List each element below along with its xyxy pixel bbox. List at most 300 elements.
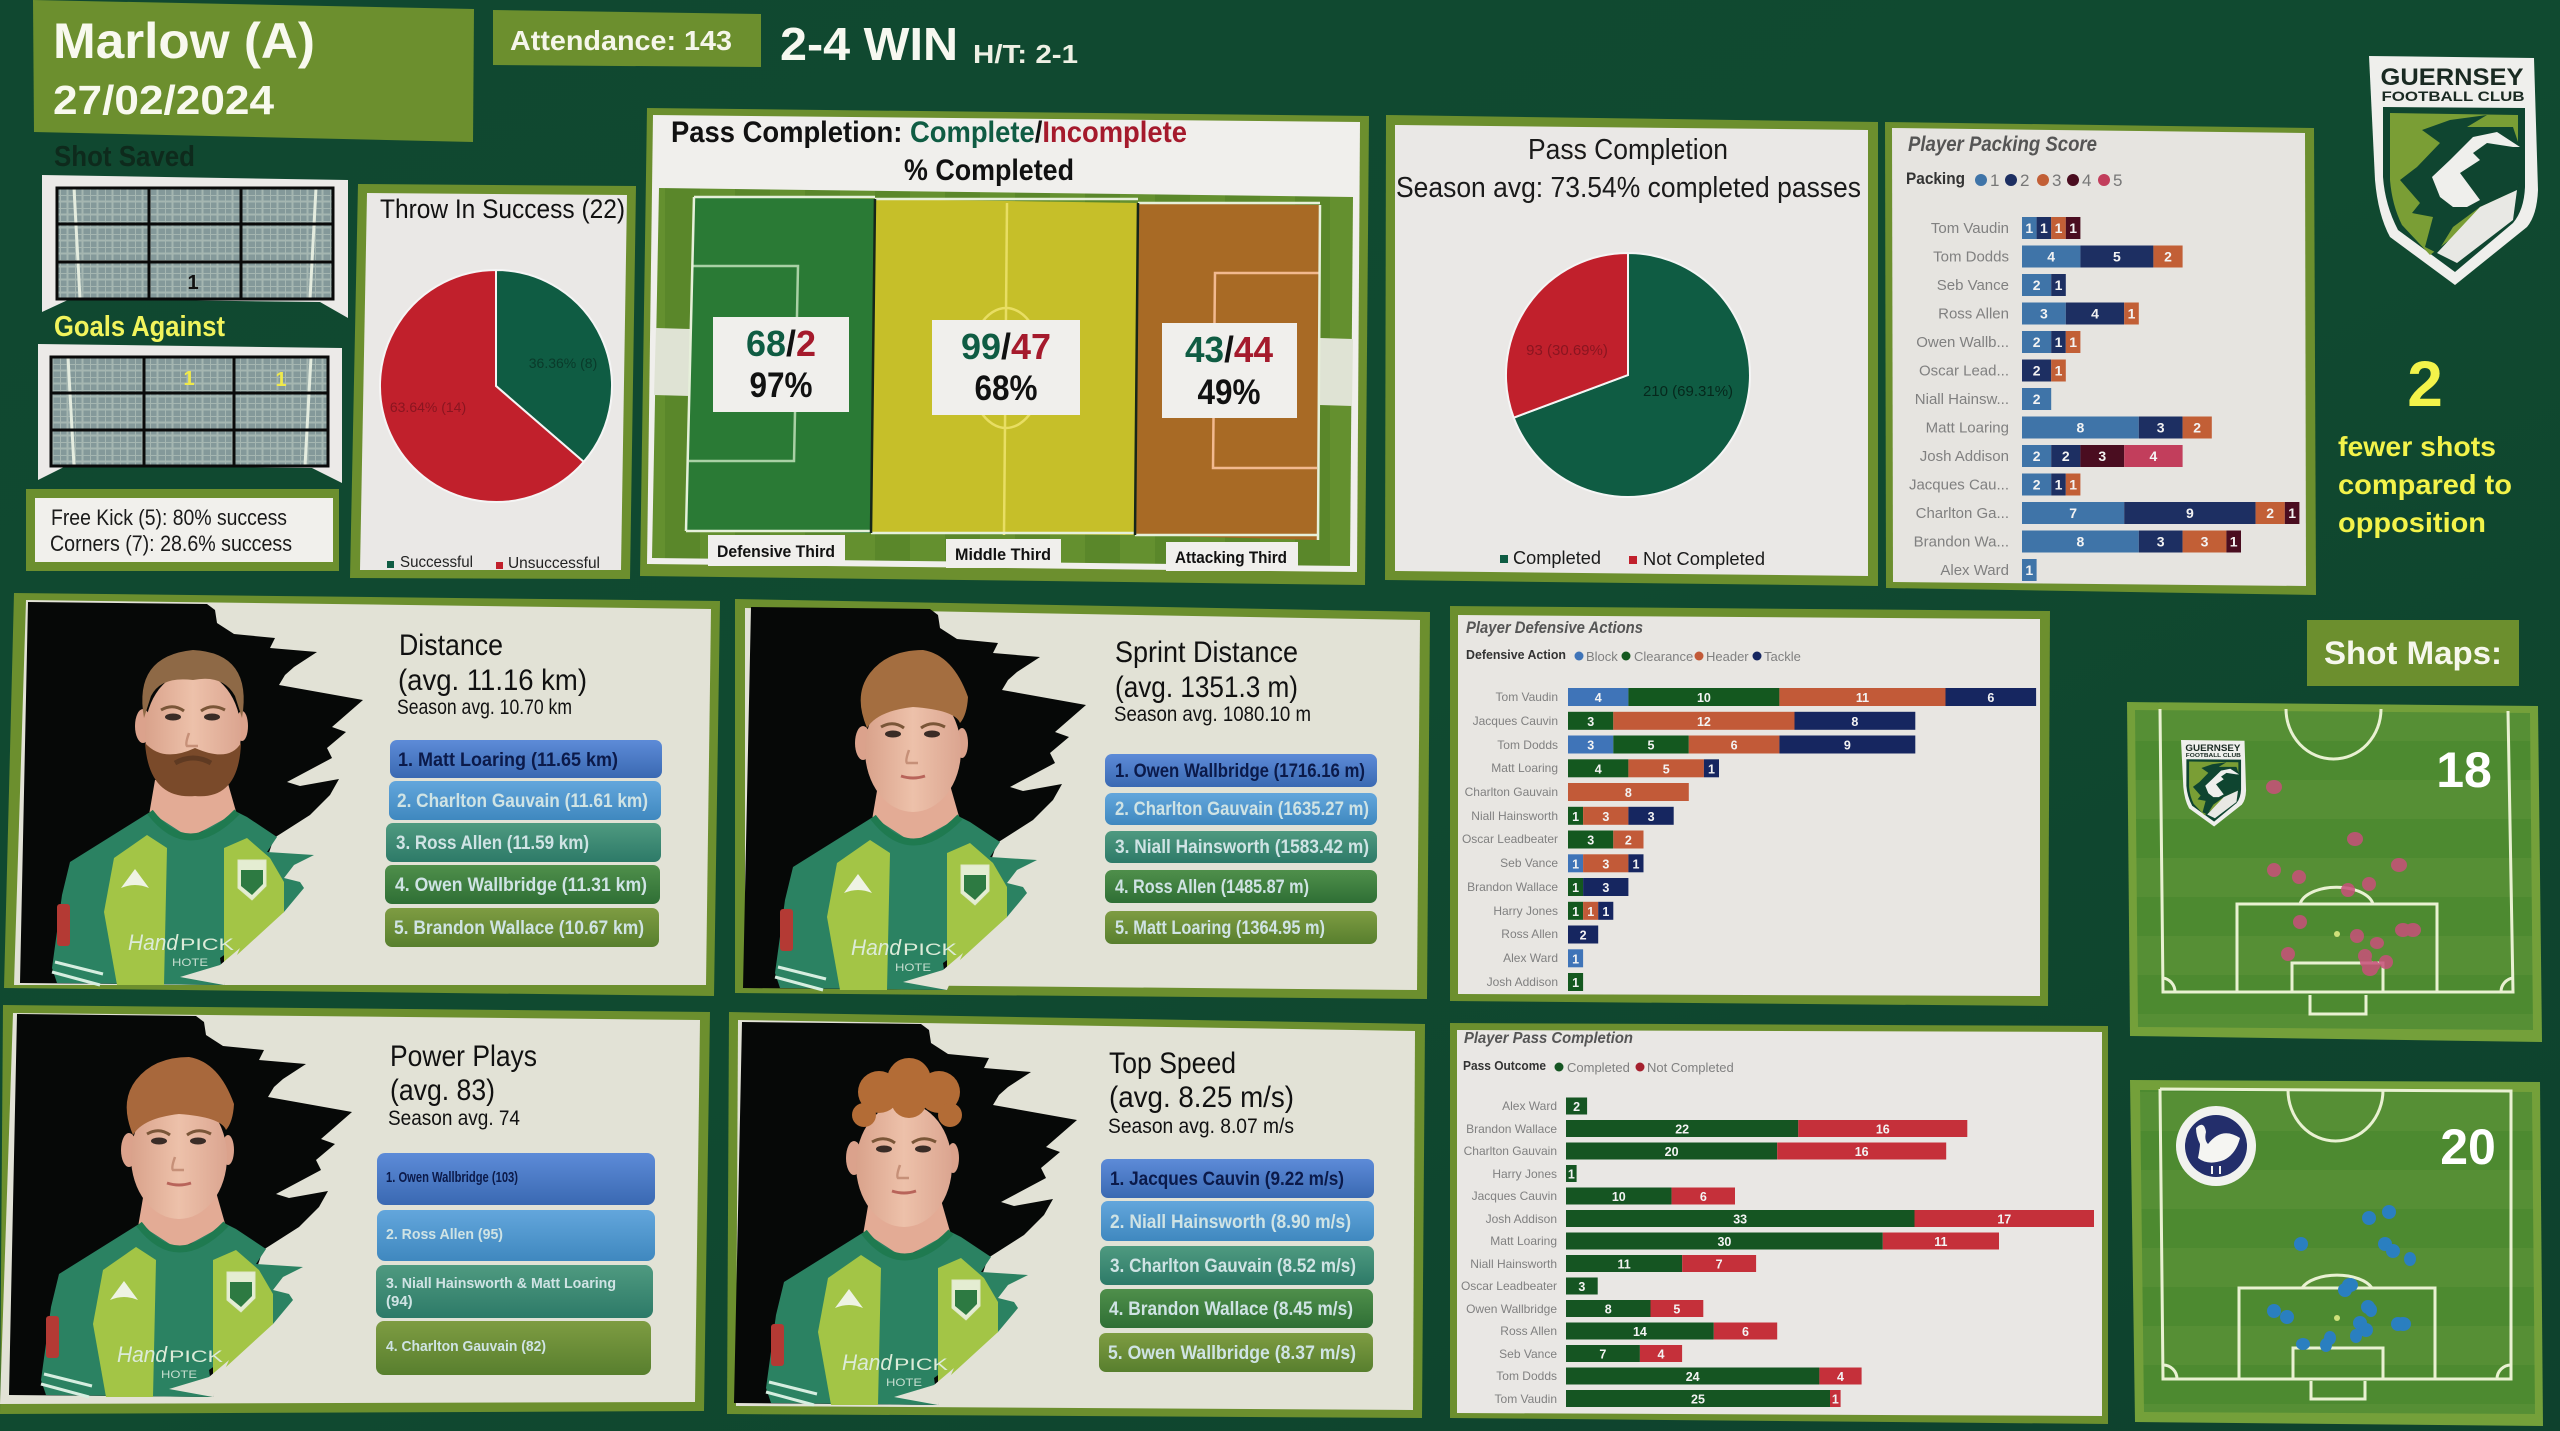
row: Tom Dodds: 4 — [2047, 248, 2055, 264]
row: Owen Wallbridge: 2 — [2033, 334, 2041, 350]
heading: top speed — [1108, 1047, 1294, 1138]
legend: passes: Completed — [1513, 548, 1601, 568]
heading: power plays: (avg. 83) — [390, 1074, 495, 1107]
row: Alex Ward: Alex Ward — [1502, 1099, 1557, 1113]
row: Tom Dodds — [1933, 246, 2183, 268]
bar chart: defensive actions — [1462, 688, 2036, 991]
value box: middle third: 99/47 — [961, 326, 1051, 367]
row: Seb Vance — [1937, 274, 2066, 296]
panel: set pieces: Free Kick (5): 80% success — [51, 505, 287, 530]
row: Matt Loaring: 8 — [2077, 420, 2085, 436]
row: Tom Vaudin — [1496, 688, 2036, 706]
row: Jacques Cauvin: Jacques Cauvin — [1473, 714, 1558, 728]
row: Matt Loaring: Matt Loaring — [1926, 420, 2009, 436]
row: Seb Vance: 3 — [1602, 857, 1609, 871]
legend: passes: Not Completed — [1643, 549, 1765, 569]
row: Josh Addison: 2 — [2033, 448, 2041, 464]
row: Seb Vance: 4 — [1658, 1348, 1665, 1362]
row: Tom Dodds: 6 — [1731, 738, 1738, 752]
row: Oscar Leadbeater: Oscar Leadbeater — [1462, 832, 1558, 846]
row: Charlton Gauvain: Charlton Gauvain — [1464, 1144, 1557, 1158]
row: Tom Dodds: Tom Dodds — [1496, 1369, 1557, 1383]
row: Josh Addison: Josh Addison — [1486, 1212, 1557, 1226]
legend: throw in — [387, 554, 600, 572]
heading: sprint distance: Sprint Distance — [1115, 636, 1298, 669]
legend: throw in: Unsuccessful — [508, 555, 600, 572]
row: Matt Loaring: 30 — [1717, 1235, 1731, 1249]
row: Alex Ward — [1940, 559, 2037, 581]
heading: defensive: Player Defensive Actions — [1466, 618, 1643, 637]
row: Niall Hainsworth: Niall Hainsworth — [1470, 1257, 1557, 1271]
row: Josh Addison — [1920, 445, 2183, 467]
row: Harry Jones: Harry Jones — [1493, 904, 1558, 918]
row: Jacques Cauvin — [1472, 1188, 1735, 1204]
callout: fewer shots — [2338, 348, 2512, 538]
title block — [33, 0, 474, 142]
row: Josh Addison: 2 — [2062, 448, 2070, 464]
label: shot maps: Shot Maps: — [2324, 635, 2502, 671]
row: Tom Vaudin: 25 — [1691, 1392, 1705, 1406]
row: Matt Loaring — [1926, 416, 2212, 438]
label: attacking third: Attacking Third — [1175, 548, 1287, 567]
row: Tom Vaudin: 4 — [1595, 691, 1602, 705]
row: Alex Ward: 1 — [1572, 952, 1579, 966]
pie chart: throw in: 36.36% (8) — [529, 355, 597, 371]
shots: Marlow — [2267, 1205, 2416, 1352]
match result — [780, 18, 1078, 70]
row: Ross Allen: Ross Allen — [1501, 927, 1558, 941]
row: Jacques Cauvin: Jacques Cauvin — [1472, 1189, 1557, 1203]
heading: power plays: Season avg. 74 — [388, 1107, 520, 1130]
panel: player packing score — [1885, 122, 2316, 595]
row: Tom Vaudin — [1495, 1390, 1841, 1407]
row: Owen Wallbridge: 1 — [2055, 334, 2063, 350]
row: Seb Vance: 1 — [2055, 277, 2063, 293]
ranking: distance — [385, 740, 662, 947]
goal: shots saved: 1 — [187, 272, 199, 294]
row: Josh Addison — [1487, 973, 1583, 991]
row: Niall Hainsworth: 11 — [1617, 1258, 1631, 1272]
legend: packing: 4 — [2082, 171, 2091, 190]
row: Ross Allen: 6 — [1742, 1325, 1749, 1339]
row: Owen Wallbridge — [1916, 331, 2080, 353]
row: Brandon Wallace: 3 — [2201, 534, 2209, 550]
ranking: distance: 1. Matt Loaring (11.65 km) — [398, 750, 618, 771]
heading: pass completion: Pass Completion: Complete/Incomplete — [671, 116, 1187, 149]
row: Ross Allen: 2 — [1580, 928, 1587, 942]
row: Seb Vance: 7 — [1599, 1348, 1606, 1362]
row: Matt Loaring: Matt Loaring — [1491, 761, 1558, 775]
row: Owen Wallbridge: 5 — [1673, 1302, 1680, 1316]
goal: goals against: 1 — [275, 369, 287, 391]
panel: top speed — [727, 1012, 1425, 1418]
row: Ross Allen — [1500, 1322, 1777, 1340]
attacking third zone — [1135, 203, 1320, 540]
row: Alex Ward: Alex Ward — [1940, 562, 2009, 579]
row: Seb Vance: Seb Vance — [1500, 856, 1558, 870]
label: attacking third — [1166, 542, 1298, 571]
icon: Guernsey FC crest — [2369, 56, 2538, 285]
row: Niall Hainsworth — [1471, 807, 1674, 825]
row: Tom Vaudin: Tom Vaudin — [1931, 220, 2009, 237]
row: Tom Vaudin: 1 — [2040, 220, 2048, 236]
row: Charlton Gauvain — [1465, 783, 1689, 801]
ranking: power plays: 4. Charlton Gauvain (82) — [386, 1338, 546, 1355]
row: Owen Wallbridge: Owen Wallb... — [1916, 334, 2009, 351]
shot map: Guernsey — [2127, 702, 2542, 1042]
row: Oscar Leadbeater: 2 — [2033, 362, 2041, 378]
value box: middle third: 68% — [974, 369, 1038, 408]
row: Josh Addison: Josh Addison — [1920, 448, 2009, 465]
player photo: power plays — [9, 1014, 352, 1397]
heading: pass completion pie: Pass Completion — [1528, 134, 1728, 166]
title block: 27/02/2024 — [53, 77, 274, 123]
row: Matt Loaring: 5 — [1663, 762, 1670, 776]
legend: throw in: Successful — [400, 554, 473, 571]
label: middle third — [946, 539, 1061, 568]
row: Jacques Cauvin: 1 — [2055, 476, 2063, 492]
row: Seb Vance — [1500, 854, 1644, 872]
heading: player pass completion: Player Pass Completion — [1464, 1030, 1633, 1047]
row: Alex Ward: Alex Ward — [1503, 951, 1558, 965]
row: Josh Addison: 17 — [1997, 1212, 2011, 1226]
goal: goals against: 1 — [183, 368, 195, 390]
heading: sprint distance: Season avg. 1080.10 m — [1114, 703, 1311, 726]
row: Tom Vaudin: Tom Vaudin — [1495, 1392, 1557, 1406]
row: Jacques Cauvin — [1909, 474, 2080, 496]
row: Ross Allen: 4 — [2091, 306, 2099, 322]
heading: power plays: Power Plays — [390, 1040, 537, 1073]
panel: pass completion by third — [640, 108, 1369, 585]
row: Niall Hainsworth — [1470, 1255, 1756, 1272]
attendance box: Attendance: 143 — [510, 25, 732, 56]
shot map: Marlow — [2130, 1080, 2543, 1426]
ranking: top speed: 2. Niall Hainsworth (8.90 m/s) — [1110, 1212, 1351, 1233]
row: Owen Wallbridge — [1466, 1300, 1703, 1317]
row: Seb Vance: Seb Vance — [1499, 1347, 1557, 1361]
row: Charlton Gauvain — [1464, 1142, 1946, 1160]
row: Josh Addison — [1486, 1210, 2094, 1227]
row: Oscar Leadbeater: 1 — [2055, 362, 2063, 378]
row: Brandon Wallace: 1 — [1572, 881, 1579, 895]
ranking: power plays: 2. Ross Allen (95) — [386, 1226, 503, 1243]
ranking: distance: 3. Ross Allen (11.59 km) — [396, 833, 589, 854]
row: Brandon Wallace: Brandon Wa... — [1914, 534, 2009, 550]
row: Niall Hainsworth: 7 — [1716, 1258, 1723, 1272]
panel: distance — [4, 593, 720, 996]
row: Harry Jones: 1 — [1587, 905, 1594, 919]
bar chart: packing — [1909, 217, 2299, 581]
ranking: top speed: 4. Brandon Wallace (8.45 m/s) — [1109, 1299, 1353, 1320]
panel: power plays — [0, 1005, 710, 1414]
value box: middle third — [932, 320, 1080, 415]
bar chart: player passes — [1461, 1098, 2094, 1407]
row: Niall Hainsworth: Niall Hainsw... — [1915, 391, 2009, 408]
middle third zone — [871, 199, 1138, 535]
legend: packing: Packing — [1906, 169, 1965, 188]
legend: defensive: Block — [1586, 649, 1618, 664]
ranking: sprint distance: 1. Owen Wallbridge (1716.16 m) — [1115, 761, 1365, 782]
subheading: season average: Season avg: 73.54% completed passes — [1396, 172, 1861, 204]
row: Oscar Leadbeater — [1461, 1278, 1598, 1294]
shots: Guernsey — [2266, 780, 2421, 976]
row: Ross Allen: Ross Allen — [1938, 306, 2009, 322]
legend: passes — [1500, 548, 1765, 569]
row: Charlton Gauvain: Charlton Gauvain — [1465, 785, 1558, 799]
row: Jacques Cauvin: 8 — [1851, 715, 1858, 729]
legend: defensive: Clearance — [1634, 649, 1693, 664]
callout: fewer shots: opposition — [2338, 507, 2486, 538]
row: Tom Vaudin: 1 — [2025, 220, 2033, 236]
panel: pass completion pie — [1385, 115, 1878, 586]
row: Charlton Gauvain: Charlton Ga... — [1916, 505, 2009, 522]
row: Niall Hainsworth: 2 — [2033, 391, 2041, 407]
legend: pass outcome — [1463, 1058, 1734, 1075]
panel: player pass completion — [1450, 1023, 2108, 1424]
row: Brandon Wallace: 16 — [1876, 1122, 1890, 1136]
row: Charlton Gauvain: 16 — [1855, 1145, 1869, 1159]
heading: sprint distance: (avg. 1351.3 m) — [1115, 671, 1298, 704]
legend: defensive: Header — [1706, 649, 1749, 664]
row: Jacques Cauvin — [1473, 712, 1915, 730]
row: Josh Addison: Josh Addison — [1487, 975, 1558, 989]
ranking: sprint distance: 4. Ross Allen (1485.87 m) — [1115, 877, 1309, 898]
row: Charlton Gauvain: 7 — [2069, 505, 2077, 521]
row: Harry Jones: 1 — [1572, 905, 1579, 919]
row: Alex Ward — [1502, 1098, 1587, 1114]
pitch — [652, 188, 1353, 566]
ranking: sprint distance: 3. Niall Hainsworth (1583.42 m) — [1115, 837, 1369, 858]
row: Charlton Gauvain: 8 — [1625, 786, 1632, 800]
row: Tom Vaudin: 1 — [2069, 220, 2077, 236]
ranking: distance: 5. Brandon Wallace (10.67 km) — [394, 918, 644, 939]
value box: attacking third: 43/44 — [1185, 329, 1273, 370]
heading: shot saved: Shot Saved — [54, 141, 195, 173]
row: Seb Vance: 2 — [2033, 277, 2041, 293]
row: Seb Vance — [1499, 1345, 1682, 1362]
goal: shots saved — [42, 175, 348, 318]
row: Oscar Leadbeater: Oscar Leadbeater — [1461, 1279, 1557, 1293]
label: defensive third — [708, 535, 845, 566]
pie chart: passes: 210 (69.31%) — [1643, 383, 1733, 400]
icon: small Guernsey crest — [2181, 740, 2246, 827]
ranking: distance: 2. Charlton Gauvain (11.61 km) — [397, 791, 648, 812]
row: Charlton Gauvain: 1 — [2288, 505, 2296, 521]
ranking: distance: 4. Owen Wallbridge (11.31 km) — [395, 875, 647, 896]
row: Harry Jones: Harry Jones — [1492, 1167, 1557, 1181]
row: Tom Vaudin: 11 — [1856, 691, 1869, 705]
panel: throw in success — [350, 184, 636, 579]
row: Tom Dodds: 4 — [1837, 1370, 1844, 1384]
title block: Marlow (A) — [53, 13, 315, 69]
row: Ross Allen: Ross Allen — [1500, 1324, 1557, 1338]
label: middle third: Middle Third — [955, 545, 1051, 564]
row: Ross Allen — [1501, 926, 1598, 944]
row: Brandon Wallace — [1466, 1120, 1967, 1137]
row: Ross Allen: 3 — [2040, 306, 2048, 322]
ranking: sprint distance — [1105, 754, 1377, 944]
row: Tom Dodds: 9 — [1844, 738, 1851, 752]
row: Brandon Wallace: Brandon Wallace — [1467, 880, 1558, 894]
row: Brandon Wallace: 8 — [2077, 534, 2085, 550]
goal: goals against — [38, 344, 342, 483]
row: Tom Dodds: 2 — [2164, 248, 2172, 264]
row: Matt Loaring: 4 — [1595, 762, 1602, 776]
ranking: top speed — [1099, 1159, 1374, 1372]
legend: packing: 3 — [2052, 171, 2061, 190]
row: Jacques Cauvin: 12 — [1697, 715, 1711, 729]
ranking: power plays — [376, 1153, 655, 1375]
legend: packing: 2 — [2020, 171, 2029, 190]
attendance box — [493, 10, 761, 67]
row: Alex Ward: 2 — [1573, 1100, 1580, 1114]
shot count: Marlow: 20 — [2440, 1119, 2496, 1175]
player photo: top speed — [734, 1022, 1077, 1405]
legend: defensive: Defensive Action — [1466, 647, 1566, 662]
match result: H/T: 2-1 — [973, 39, 1078, 69]
row: Oscar Leadbeater: 3 — [1587, 834, 1594, 848]
row: Tom Vaudin: 10 — [1697, 691, 1711, 705]
row: Ross Allen: 14 — [1633, 1325, 1647, 1339]
legend: packing: 1 — [1990, 171, 1999, 190]
ranking: power plays: (94) — [386, 1293, 413, 1310]
row: Ross Allen: 1 — [2128, 306, 2136, 322]
row: Jacques Cauvin: 10 — [1612, 1190, 1626, 1204]
heading: distance: (avg. 11.16 km) — [398, 664, 587, 697]
row: Matt Loaring: 2 — [2193, 420, 2201, 436]
value box: defensive third: 68/2 — [746, 323, 816, 364]
row: Matt Loaring: Matt Loaring — [1490, 1234, 1557, 1248]
row: Matt Loaring: 3 — [2157, 420, 2165, 436]
heading: throw in: Throw In Success (22) — [380, 194, 625, 224]
row: Tom Dodds — [1496, 1368, 1862, 1384]
callout: fewer shots: compared to — [2338, 469, 2512, 500]
row: Tom Vaudin: 1 — [2055, 220, 2063, 236]
row: Tom Dodds: Tom Dodds — [1497, 738, 1558, 752]
row: Owen Wallbridge: 1 — [2069, 334, 2077, 350]
row: Brandon Wallace: 1 — [2230, 534, 2238, 550]
row: Harry Jones — [1492, 1165, 1577, 1182]
row: Jacques Cauvin: Jacques Cau... — [1909, 476, 2009, 494]
ranking: sprint distance: 5. Matt Loaring (1364.95 m) — [1115, 918, 1325, 939]
row: Tom Dodds: 3 — [1587, 738, 1594, 752]
row: Tom Dodds: Tom Dodds — [1933, 248, 2009, 266]
heading: top speed: Season avg. 8.07 m/s — [1108, 1115, 1294, 1138]
ranking: top speed: 5. Owen Wallbridge (8.37 m/s) — [1108, 1343, 1356, 1364]
row: Oscar Leadbeater: Oscar Lead... — [1919, 362, 2009, 380]
heading: packing: Player Packing Score — [1908, 133, 2097, 156]
row: Charlton Gauvain: 9 — [2186, 505, 2194, 521]
legend: packing — [1906, 169, 2122, 190]
row: Oscar Leadbeater — [1462, 830, 1644, 848]
value box: attacking third: 49% — [1198, 373, 1260, 412]
legend: defensive: Tackle — [1764, 649, 1801, 664]
ranking: power plays: 3. Niall Hainsworth & Matt Loaring — [386, 1275, 616, 1292]
row: Seb Vance: Seb Vance — [1937, 277, 2009, 294]
row: Harry Jones: 1 — [1568, 1168, 1575, 1182]
row: Harry Jones — [1493, 902, 1613, 920]
legend: pass outcome: Completed — [1567, 1060, 1630, 1075]
row: Jacques Cauvin: 6 — [1700, 1190, 1707, 1204]
row: Harry Jones: 1 — [1602, 905, 1609, 919]
pie chart: throw in — [380, 270, 612, 502]
row: Ross Allen — [1938, 302, 2139, 324]
player photo: distance — [20, 602, 363, 985]
row: Alex Ward: 1 — [2025, 562, 2033, 578]
row: Tom Vaudin: 6 — [1987, 691, 1994, 705]
legend: defensive — [1466, 647, 1801, 664]
row: Tom Vaudin — [1931, 217, 2080, 239]
heading: goals against: Goals Against — [54, 311, 225, 343]
heading: top speed: (avg. 8.25 m/s) — [1109, 1081, 1294, 1114]
row: Jacques Cauvin: 3 — [1587, 715, 1594, 729]
row: Charlton Gauvain: 2 — [2266, 505, 2274, 521]
row: Jacques Cauvin: 2 — [2033, 476, 2041, 492]
ranking: top speed: 3. Charlton Gauvain (8.52 m/s) — [1110, 1256, 1356, 1277]
row: Oscar Leadbeater: 2 — [1625, 834, 1632, 848]
ranking: power plays: 1. Owen Wallbridge (103) — [386, 1169, 518, 1186]
value box: defensive third — [713, 317, 849, 412]
row: Alex Ward — [1503, 949, 1583, 967]
row: Tom Dodds — [1497, 736, 1915, 754]
row: Tom Dodds: 5 — [2113, 248, 2121, 264]
row: Josh Addison: 1 — [1572, 976, 1579, 990]
row: Brandon Wallace: Brandon Wallace — [1466, 1122, 1557, 1136]
row: Owen Wallbridge: 8 — [1605, 1302, 1612, 1316]
defensive third zone — [686, 197, 875, 533]
row: Seb Vance: 1 — [1572, 857, 1579, 871]
row: Matt Loaring — [1490, 1232, 1999, 1250]
row: Oscar Leadbeater — [1919, 360, 2066, 382]
row: Matt Loaring: 1 — [1708, 762, 1715, 776]
heading: distance — [397, 629, 587, 719]
heading: percent completed: % Completed — [904, 154, 1074, 187]
row: Charlton Gauvain — [1916, 502, 2299, 524]
panel: player defensive actions — [1450, 606, 2050, 1006]
row: Tom Dodds: 24 — [1686, 1370, 1700, 1384]
row: Brandon Wallace: 22 — [1675, 1122, 1689, 1136]
row: Jacques Cauvin: 1 — [2069, 476, 2077, 492]
legend: pass outcome: Pass Outcome — [1463, 1058, 1546, 1073]
callout: fewer shots: 2 — [2407, 348, 2443, 420]
row: Josh Addison: 33 — [1733, 1212, 1747, 1226]
pie chart: passes: 93 (30.69%) — [1526, 342, 1608, 359]
legend: packing: 5 — [2113, 171, 2122, 190]
heading: sprint distance — [1114, 636, 1311, 726]
row: Matt Loaring — [1491, 759, 1719, 777]
heading: power plays — [388, 1040, 537, 1130]
heading: distance: Season avg. 10.70 km — [397, 696, 572, 719]
row: Josh Addison: 3 — [2098, 448, 2106, 464]
callout: fewer shots: fewer shots — [2338, 431, 2496, 462]
panel: sprint distance — [735, 599, 1430, 999]
row: Owen Wallbridge: Owen Wallbridge — [1466, 1302, 1557, 1316]
panel: set pieces: Corners (7): 28.6% success — [50, 531, 292, 556]
pie chart: passes — [1506, 253, 1750, 497]
match result: 2-4 WIN — [780, 18, 958, 70]
shot count: Guernsey: 18 — [2436, 742, 2492, 798]
icon: Marlow FC crest — [2176, 1106, 2256, 1186]
row: Brandon Wallace — [1467, 878, 1628, 896]
row: Matt Loaring: 11 — [1934, 1235, 1948, 1249]
label: defensive third: Defensive Third — [717, 542, 835, 561]
ranking: top speed: 1. Jacques Cauvin (9.22 m/s) — [1110, 1169, 1344, 1190]
row: Oscar Leadbeater: 3 — [1578, 1280, 1585, 1294]
ranking: sprint distance: 2. Charlton Gauvain (1635.27 m) — [1115, 799, 1369, 820]
row: Tom Dodds: 5 — [1648, 738, 1655, 752]
heading: top speed: Top Speed — [1109, 1047, 1236, 1080]
legend: pass outcome: Not Completed — [1647, 1060, 1734, 1075]
